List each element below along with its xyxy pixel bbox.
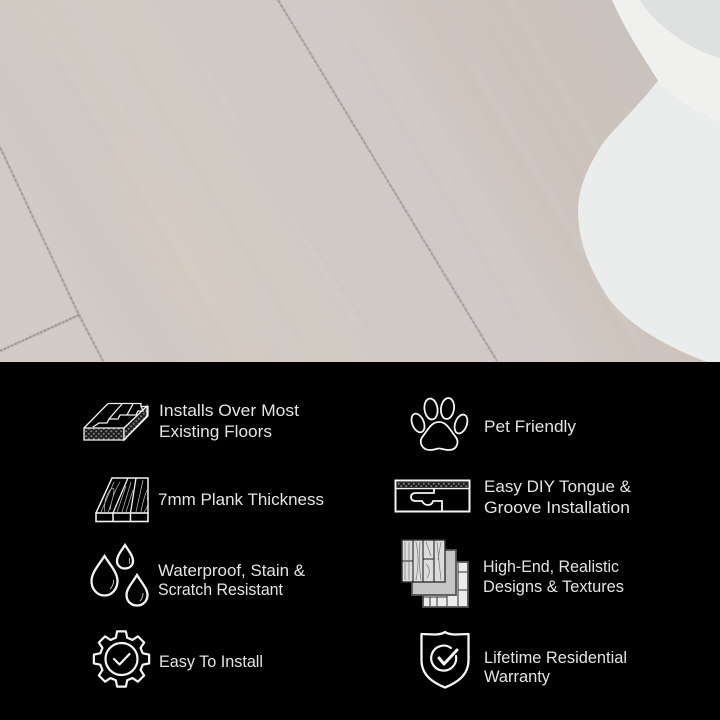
plank seams [0,0,497,361]
text: lifetime residential warranty [484,648,627,686]
feature: installs over most existing floors [84,401,299,441]
feature: easy to install [94,631,263,687]
icon: layered floor slab [84,404,148,440]
text: high-end realistic designs and textures: High-End, Realistic [483,557,619,576]
icon: plank cross-section [96,478,148,522]
white vase [578,0,720,362]
text: pet friendly: Pet Friendly [484,417,577,436]
text: installs over most existing floors: Installs Over Most [159,401,299,420]
icon: shield with check [422,632,468,688]
feature: pet friendly [409,397,577,450]
icon: stacked texture samples [402,540,468,607]
feature: lifetime residential warranty [422,632,627,688]
text: easy DIY tongue and groove installation [484,477,632,517]
text: waterproof, stain and scratch resistant [158,561,306,599]
black feature panel [0,362,720,720]
text: easy to install: Easy To Install [159,652,263,671]
text: high-end realistic designs and textures [483,557,624,596]
floor photo [0,0,720,412]
text: easy DIY tongue and groove installation: Groove Installation [484,498,630,517]
feature: 7mm plank thickness [96,478,324,522]
feature: high-end realistic designs and textures [402,540,624,607]
text: lifetime residential warranty: Lifetime Residential [484,648,627,667]
icon: paw print [409,397,470,450]
text: installs over most existing floors [159,401,299,441]
icon: three water drops [92,545,148,606]
icon: tongue and groove joint [396,480,470,512]
icon: gear with check [94,631,149,687]
text: lifetime residential warranty: Warranty [484,667,550,686]
text: easy DIY tongue and groove installation: Easy DIY Tongue & [484,477,632,496]
text: waterproof, stain and scratch resistant: Scratch Resistant [158,580,283,599]
text: high-end realistic designs and textures: Designs & Textures [483,577,624,596]
feature: easy DIY tongue and groove installation [396,477,632,517]
text: waterproof, stain and scratch resistant: Waterproof, Stain & [158,561,306,580]
text: 7mm plank thickness: 7mm Plank Thickness [158,490,324,509]
text: installs over most existing floors: Existing Floors [159,422,272,441]
feature: waterproof, stain and scratch resistant [92,545,306,606]
